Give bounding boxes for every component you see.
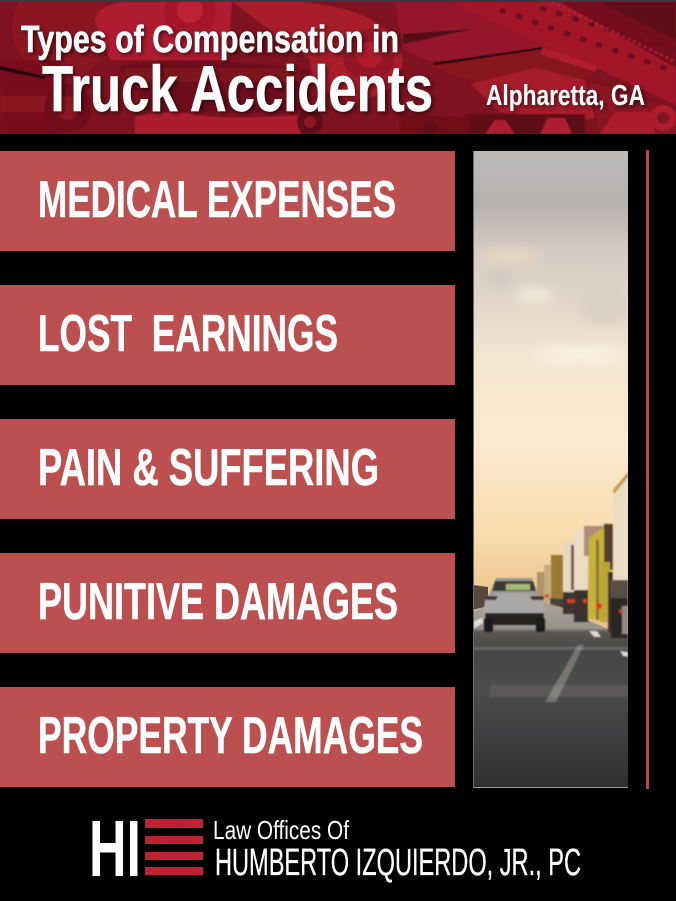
- panel: pain and suffering: PAIN & SUFFERING: [38, 439, 379, 497]
- panel: property damages: [0, 687, 455, 787]
- header title line 2: Truck Accidents: [42, 52, 433, 125]
- panel: punitive damages: [0, 553, 455, 653]
- trucks: [537, 472, 628, 638]
- brackets: [434, 48, 594, 78]
- panel: lost earnings: [0, 285, 455, 385]
- shoulder embankment: [473, 585, 488, 610]
- panel: medical expenses: MEDICAL EXPENSES: [38, 171, 396, 229]
- panel: lost earnings: LOST EARNINGS: [38, 305, 338, 363]
- road surface: [473, 600, 628, 788]
- center scroll: [232, 2, 403, 100]
- road markings: [473, 617, 628, 702]
- logo monogram: HI: [89, 804, 141, 893]
- panel: property damages: PROPERTY DAMAGES: [38, 707, 423, 765]
- cornice: [452, 2, 676, 105]
- panel: medical expenses: [0, 151, 455, 251]
- soffit beam: [395, 2, 546, 62]
- moulding band: [118, 61, 310, 112]
- top scroll: [95, 2, 232, 60]
- firm name line 1: Law Offices Of: [213, 815, 350, 845]
- car: [483, 578, 545, 632]
- accent vertical line: [646, 150, 649, 789]
- logo and firm name: [89, 804, 581, 893]
- left column and mouldings: [12, 0, 112, 78]
- photo: truck queue on highway at sunset: [473, 151, 631, 788]
- road hairline: [473, 787, 628, 788]
- clouds: [480, 251, 631, 359]
- base column: [135, 113, 300, 134]
- logo bars: [145, 819, 203, 875]
- header banner: [0, 0, 676, 135]
- header title line 1: Types of Compensation in: [21, 19, 399, 61]
- panel: punitive damages: PUNITIVE DAMAGES: [38, 573, 398, 631]
- panel: pain and suffering: [0, 419, 455, 519]
- lower mouldings: [465, 114, 585, 134]
